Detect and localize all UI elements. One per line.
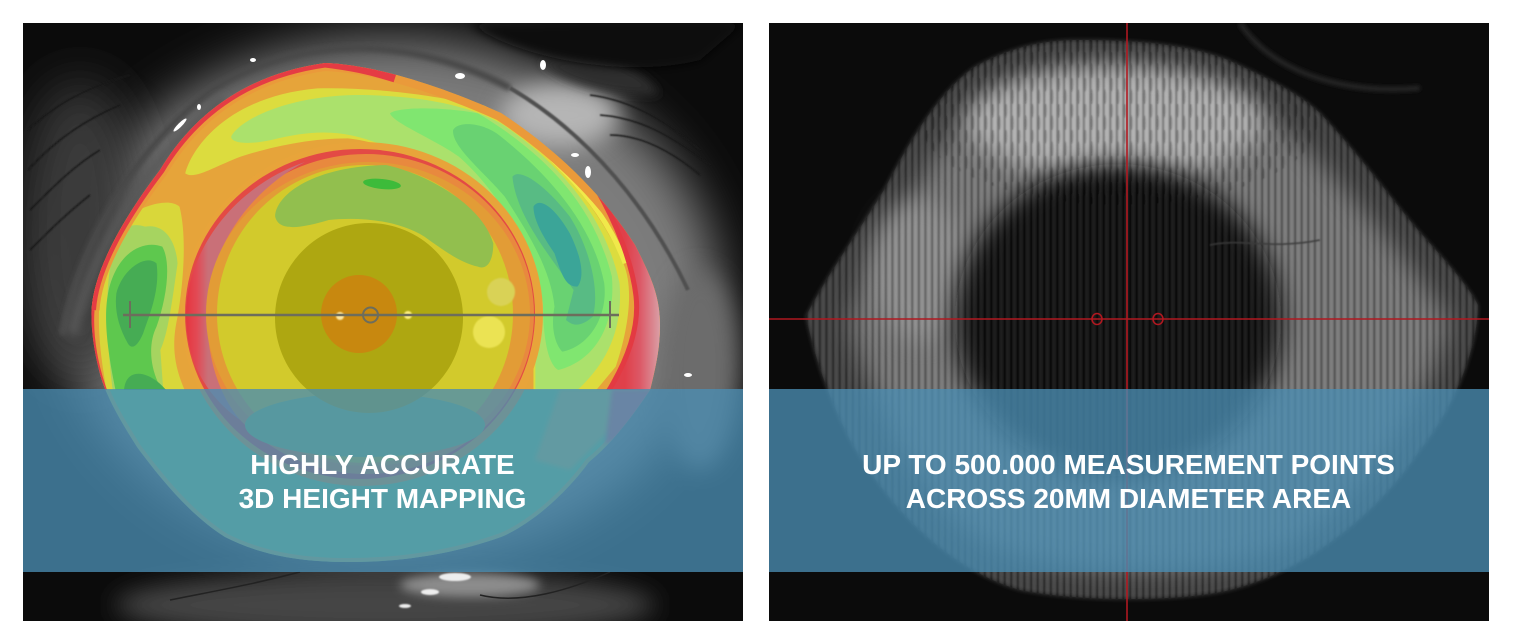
caption band xyxy=(23,389,743,572)
caption: measurement points xyxy=(862,449,1395,514)
caption: height mapping xyxy=(239,449,526,514)
teal xyxy=(533,203,581,287)
dark green xyxy=(512,174,595,325)
eye photo background xyxy=(20,23,743,639)
inner upper green blob xyxy=(275,165,493,267)
light green xyxy=(231,95,620,403)
lower lens base under caption band xyxy=(102,381,652,562)
left light green xyxy=(107,225,178,403)
left green xyxy=(106,244,168,390)
caption: height mapping: 3D HEIGHT MAPPING xyxy=(239,483,526,514)
panel: measurement points xyxy=(769,23,1489,621)
upper contour layers xyxy=(91,63,660,390)
inner lower green area xyxy=(245,393,485,457)
caption: height mapping: HIGHLY ACCURATE xyxy=(250,449,515,480)
limbus ring xyxy=(62,48,510,335)
panel: 3D height map xyxy=(20,23,743,639)
scale line with centre marker xyxy=(123,301,619,328)
left yellow blob xyxy=(98,202,184,390)
red crosshair xyxy=(769,23,1489,621)
yellow band xyxy=(185,88,629,403)
caption: measurement points: UP TO 500.000 MEASUREMENT POINTS xyxy=(862,449,1395,480)
left dark green xyxy=(116,260,157,347)
inner lens rings xyxy=(181,142,543,486)
faint reflected arc xyxy=(1240,23,1420,89)
projected fringe image xyxy=(804,38,1480,601)
green xyxy=(390,108,612,370)
caption: measurement points: ACROSS 20MM DIAMETER AREA xyxy=(906,483,1351,514)
caption band xyxy=(769,389,1489,572)
eyelashes xyxy=(28,75,710,250)
right pink edge xyxy=(605,204,660,390)
lower lid strip xyxy=(111,572,659,621)
colour map lens overlay xyxy=(91,63,660,562)
lens rim xyxy=(92,63,660,390)
mid green xyxy=(453,124,605,352)
specular spots xyxy=(172,58,692,377)
